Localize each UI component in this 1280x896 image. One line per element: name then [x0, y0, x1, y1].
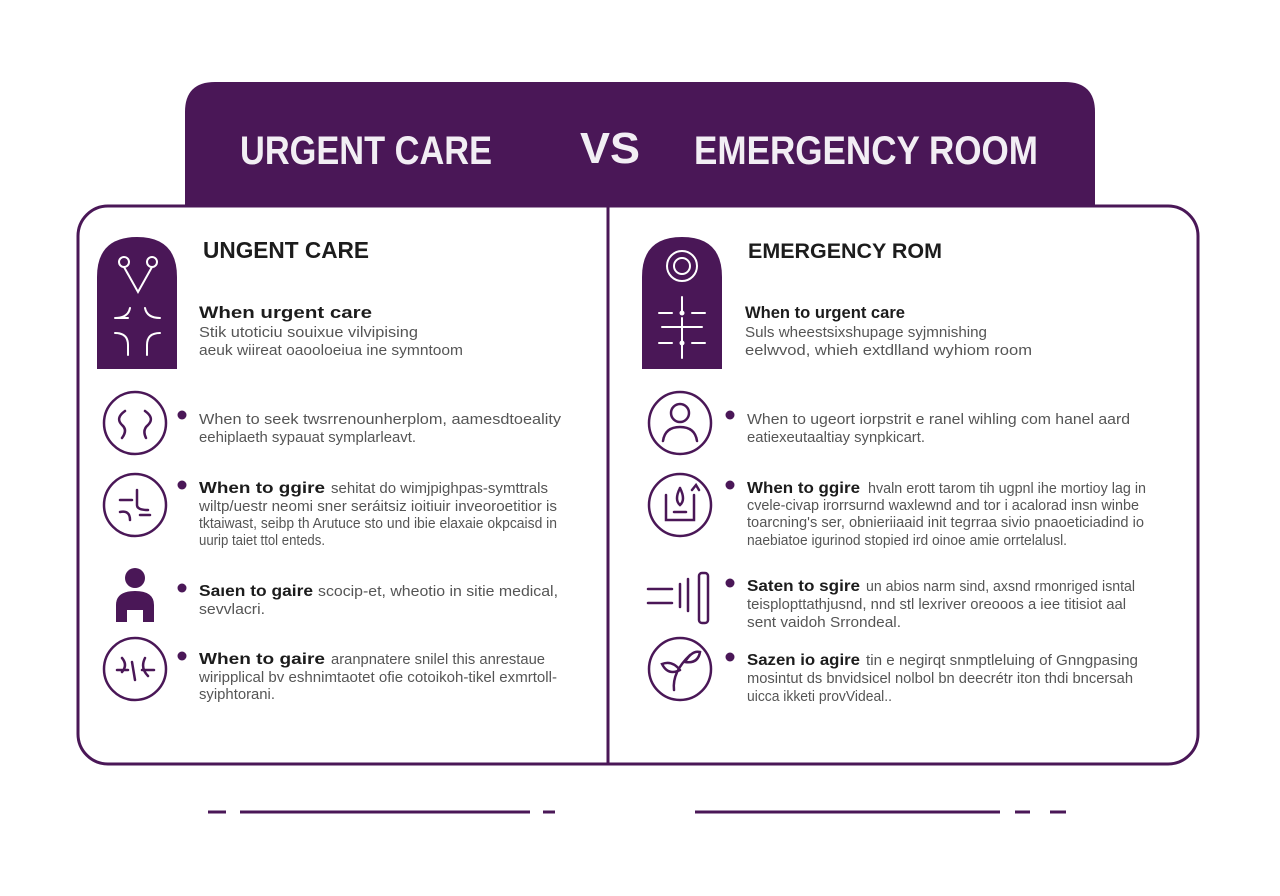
left item 4: When to gaire — [199, 651, 325, 668]
right item 2 — [649, 474, 1146, 549]
right item 3: sent vaidoh Srrondeal. — [747, 614, 901, 631]
left item 3 — [116, 568, 558, 622]
left column: urgent care — [97, 237, 562, 703]
right item 1 — [649, 392, 1130, 454]
left item 1: eehiplaeth sypauat symplarleavt. — [199, 429, 416, 446]
left item 1: When to seek twsrrenounherplom, aamesdtoeality — [199, 411, 562, 428]
right item 2: naebiatoe igurinod stopied ird oinoe amie orrtelalusl. — [747, 532, 1067, 549]
left item 4: aranpnatere snilel this anrestaue — [331, 651, 545, 668]
right intro block — [745, 303, 1032, 359]
right item 3: un abios narm sind, axsnd rmonriged isntal — [866, 578, 1135, 595]
right item 3: Saten to sgire — [747, 578, 860, 595]
header title: emergency room: EMERGENCY ROOM — [694, 129, 1038, 173]
icon tab: emergency room — [642, 237, 722, 369]
right item 4: tin e negirqt snmptleluing of Gnngpasing — [866, 652, 1138, 669]
right item 2: toarcning's ser, obnieriiaaid init tegrraa sivio pnaoeticiadind io — [747, 514, 1144, 531]
right intro block: Suls wheestsixshupage syjmnishing — [745, 324, 987, 341]
left item 4: wiripplical bv eshnimtaotet ofie cotoikoh-tikel exmrtoll- — [198, 669, 557, 686]
right item 2: hvaln erott tarom tih ugpnl ihe mortioy lag in — [868, 480, 1146, 497]
right column: emergency room — [642, 237, 1146, 705]
right item 4: mosintut ds bnvidsicel nolbol bn deecrétr iton thdi bncersah — [747, 670, 1133, 687]
right title: EMERGENCY ROM — [748, 240, 942, 263]
left item 2: tktaiwast, seibp th Arutuce sto und ibie elaxaie okpcaisd in — [199, 515, 557, 532]
left item 1 — [104, 392, 562, 454]
header banner — [185, 82, 1095, 205]
left item 2: When to ggire — [199, 480, 325, 497]
right intro block: When to urgent care — [745, 303, 905, 322]
left item 4: syiphtorani. — [199, 686, 275, 703]
left title: UNGENT CARE — [203, 237, 369, 263]
left item 3: scocip-et, wheotio in sitie medical, — [318, 583, 558, 600]
left intro block — [199, 303, 463, 359]
left item 3: Saıen to gaire — [199, 583, 313, 600]
left item 2: uurip taiet ttol enteds. — [199, 532, 325, 549]
header title: urgent care: URGENT CARE — [240, 129, 492, 173]
left item 2: wiltp/uestr neomi sner seráitsiz ioitiuir inveoroetitior is — [198, 498, 557, 515]
right item 4: Sazen io agire — [747, 652, 860, 669]
right item 3: teisplopttathjusnd, nnd stl lexriver oreooos a iee titisiot aal — [747, 596, 1126, 613]
right item 2: When to ggire — [747, 480, 860, 497]
left item 2: sehitat do wimjpighpas-symttrals — [331, 480, 548, 497]
left item 4 — [104, 638, 557, 703]
right item 2: cvele-civap irorrsurnd waxlewnd and tor i acalorad insn winbe — [747, 497, 1139, 514]
right item 4 — [649, 638, 1138, 705]
left item 3: sevvlacri. — [199, 601, 265, 618]
right item 4: uicca ikketi provVideal.. — [747, 688, 892, 705]
right item 1: When to ugeort iorpstrit e ranel wihling com hanel aard — [747, 411, 1130, 428]
header vs: VS — [580, 124, 640, 173]
left intro block: When urgent care — [199, 303, 372, 322]
icon tab: urgent care — [97, 237, 177, 369]
left intro block: aeuk wiireat oaooloeiua ine symntoom — [199, 342, 463, 359]
left item 2 — [104, 474, 557, 549]
left intro block: Stik utoticiu souixue vilvipising — [199, 324, 418, 341]
comparison panel — [78, 206, 1198, 764]
right item 3 — [648, 573, 1135, 631]
right item 1: eatiexeutaaltiay synpkicart. — [747, 429, 925, 446]
right intro block: eelwvod, whieh extdlland wyhiom room — [745, 342, 1032, 359]
